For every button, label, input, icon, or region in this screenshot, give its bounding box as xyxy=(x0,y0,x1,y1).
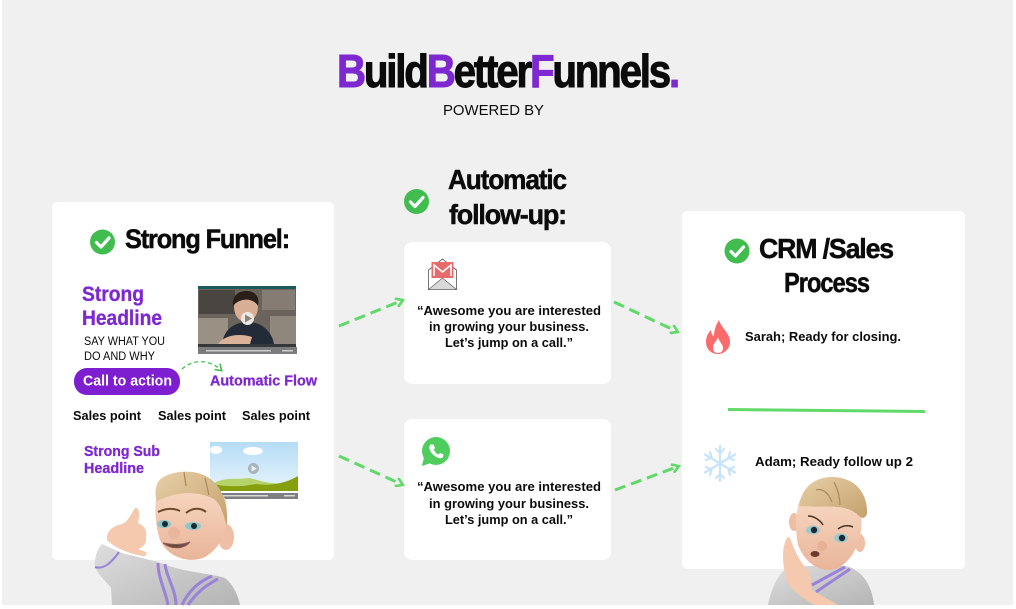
heading: automatic follow-up xyxy=(448,164,567,230)
sales points xyxy=(73,408,311,423)
icon: check follow-up xyxy=(404,189,429,214)
hair xyxy=(799,477,867,518)
hand xyxy=(107,508,147,556)
sales points: Sales point xyxy=(73,408,142,423)
panel: strong funnel xyxy=(52,202,334,560)
powered by: POWERED BY xyxy=(443,102,544,119)
nose and mouth xyxy=(163,527,190,548)
shirt xyxy=(768,566,874,605)
text: say what you do: SAY WHAT YOU xyxy=(84,336,165,348)
strong headline xyxy=(82,283,162,330)
face xyxy=(796,494,862,570)
arrow: funnel to whatsapp xyxy=(339,456,402,484)
eyes xyxy=(806,526,848,542)
heading group: automatic follow-up xyxy=(404,164,567,230)
text: say what you do xyxy=(84,336,165,363)
heading: crm sales process xyxy=(759,233,894,298)
brand title: BuildBetterFunnels. xyxy=(337,45,678,97)
hair xyxy=(156,472,227,526)
sales points: Sales point xyxy=(158,408,227,423)
ears xyxy=(789,513,799,531)
button: call to action: Call to action xyxy=(83,372,172,390)
strong headline: Strong xyxy=(82,283,144,306)
message text: “Awesome you are interested xyxy=(417,479,601,494)
strong sub headline: Headline xyxy=(84,461,144,477)
video thumbnail: woman xyxy=(198,286,297,354)
panel: whatsapp follow-up xyxy=(404,419,611,560)
shirt xyxy=(95,544,240,605)
eyes xyxy=(157,520,201,530)
arrow: whatsapp to crm xyxy=(615,466,678,490)
heading: crm sales process: CRM /Sales xyxy=(759,233,894,264)
heading: crm sales process: Process xyxy=(784,267,870,298)
heading: strong funnel: Strong Funnel: xyxy=(125,224,289,254)
hand xyxy=(783,537,838,605)
panel: email follow-up xyxy=(404,242,611,384)
icon: snowflake xyxy=(705,446,735,481)
heading: automatic follow-up: Automatic xyxy=(448,164,567,195)
text: say what you do: DO AND WHY xyxy=(84,351,155,363)
message text xyxy=(417,479,601,527)
face xyxy=(155,482,227,560)
message text: in growing your business. xyxy=(429,496,589,511)
icon: flame xyxy=(706,320,730,354)
eyebrows xyxy=(808,516,853,529)
message text: Let’s jump on a call.” xyxy=(445,512,573,527)
strong headline: Headline xyxy=(82,307,162,330)
message text: Let’s jump on a call.” xyxy=(445,335,573,350)
video thumbnail: landscape xyxy=(210,442,298,499)
strong sub headline xyxy=(84,444,160,477)
arrow: automatic flow xyxy=(182,362,221,370)
message text: “Awesome you are interested xyxy=(417,303,601,318)
arrow: funnel to email xyxy=(339,300,402,326)
icon: gmail envelope xyxy=(428,259,456,290)
sales points: Sales point xyxy=(242,408,311,423)
strong sub headline: Strong Sub xyxy=(84,444,160,460)
message text: in growing your business. xyxy=(429,319,589,334)
icon: check crm xyxy=(724,238,750,264)
button: call to action xyxy=(74,368,180,395)
message text xyxy=(417,303,601,350)
heading: automatic follow-up: follow-up: xyxy=(449,199,566,230)
eyebrows xyxy=(158,509,206,513)
arrow: email to crm xyxy=(614,302,677,332)
icon: whatsapp xyxy=(422,437,450,466)
divider line xyxy=(728,410,925,412)
nose and mouth xyxy=(810,541,827,557)
label: automatic flow: Automatic Flow xyxy=(210,372,317,390)
icon: check strong funnel xyxy=(90,230,115,254)
character: left memoji calling gesture xyxy=(95,472,240,605)
text: adam: Adam; Ready follow up 2 xyxy=(755,454,913,469)
text: sarah: Sarah; Ready for closing. xyxy=(745,329,901,344)
ear xyxy=(218,524,234,550)
character: right memoji thinking xyxy=(768,477,874,605)
panel: crm sales process xyxy=(682,211,965,569)
